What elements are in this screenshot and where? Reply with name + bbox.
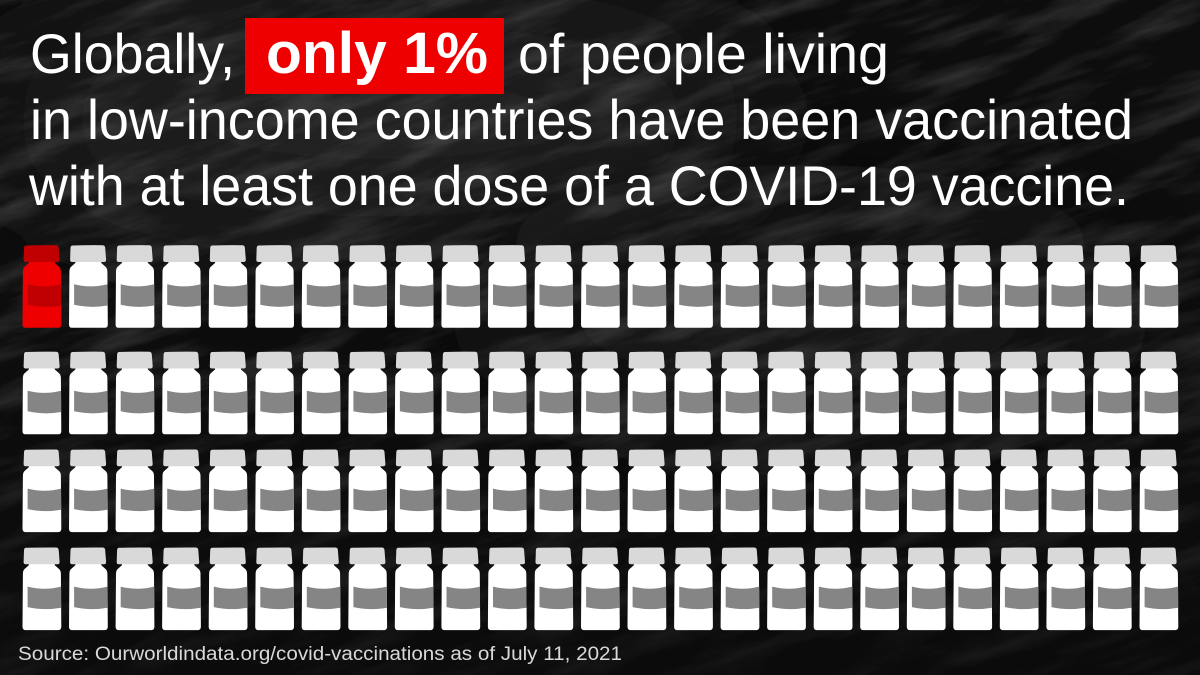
source note: Source: Ourworldindata.org/covid-vaccinations as of July 11, 2021: [18, 644, 622, 665]
title line 1: Globally: Globally,: [30, 22, 235, 85]
title line 2: in low-income countries have been vaccinated: [30, 88, 1133, 151]
vial row 1: [22, 245, 1178, 328]
vial grid: 100 vials: [22, 245, 1178, 630]
vial row 2: [22, 352, 1178, 434]
title line 1: of people living: of people living: [518, 22, 889, 85]
highlight: only 1% red box: only 1%: [266, 21, 488, 86]
vial row 4: [22, 547, 1178, 630]
title: headline text: [28, 18, 1133, 217]
icon: red vaccinated vial: [22, 245, 61, 328]
vial row 3: [22, 449, 1178, 532]
title line 3: with at least one dose of a COVID-19 vaccine.: [28, 154, 1129, 217]
